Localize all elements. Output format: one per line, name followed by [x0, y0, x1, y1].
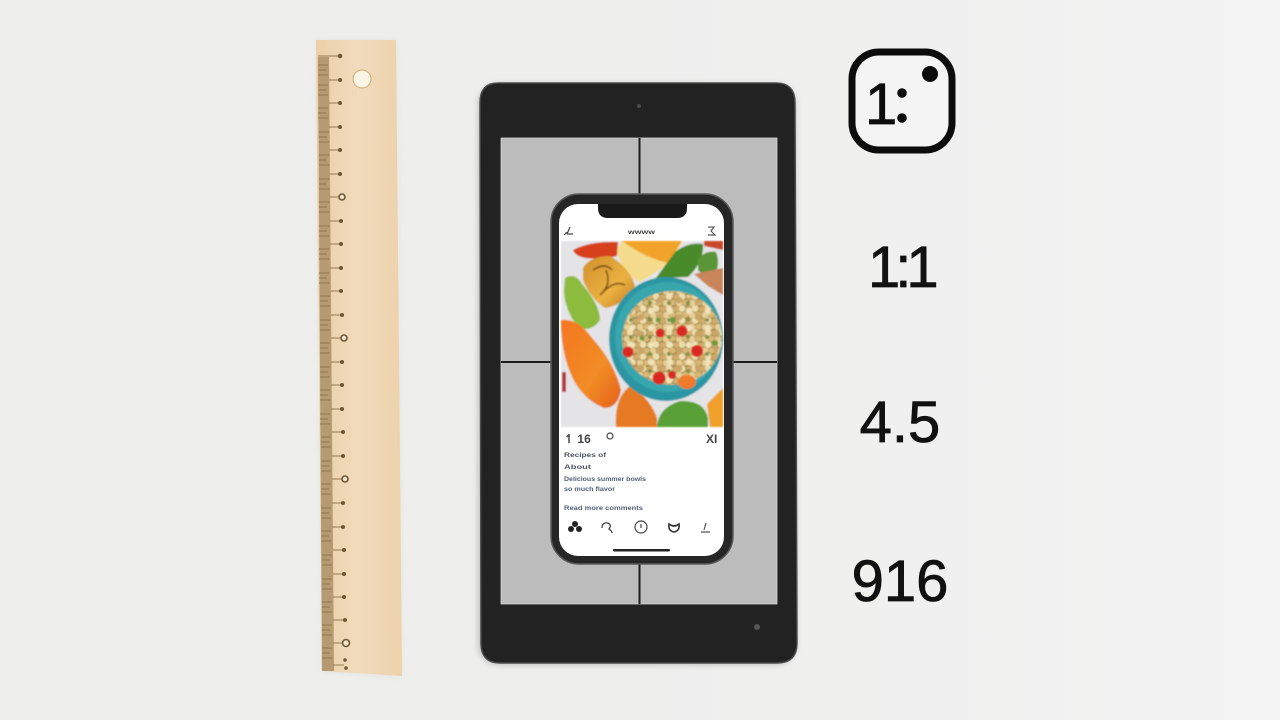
post actions: XI	[706, 432, 717, 446]
green vegetable	[656, 244, 703, 278]
nav icon 5	[701, 523, 710, 532]
nav icon 2	[602, 523, 612, 533]
ruler tick dots	[338, 54, 348, 670]
bottom nav icons	[568, 521, 710, 533]
nav icon 4	[669, 524, 679, 532]
orange piece	[678, 375, 696, 389]
ruler hanging hole	[353, 70, 371, 88]
smartphone	[551, 194, 733, 564]
post caption: Read more comments	[564, 506, 644, 512]
post caption: so much flavor	[564, 487, 616, 493]
icon: aspect ratio badge: 1	[865, 72, 897, 137]
ruler fine ticks	[318, 65, 332, 658]
label: 4.5: 4.5	[860, 390, 940, 455]
share icon	[708, 227, 715, 235]
red pepper	[573, 242, 618, 259]
icon: aspect ratio badge	[852, 52, 952, 150]
ruler	[316, 40, 402, 677]
phone screen	[559, 204, 724, 556]
ruler ring marks	[339, 194, 350, 646]
tablet screen grid	[501, 138, 777, 604]
post actions	[564, 432, 717, 446]
ruler major ticks	[318, 56, 344, 665]
bottom squash	[616, 386, 657, 427]
nav icon 3	[635, 521, 647, 533]
roasted squash	[583, 256, 635, 308]
post caption: Delicious summer bowls	[564, 477, 647, 483]
app top bar	[564, 227, 715, 236]
red chili	[562, 372, 566, 392]
label: 916: 916	[852, 549, 948, 614]
tablet body	[480, 83, 797, 663]
bottom right squash	[707, 388, 723, 427]
label: 1:1: 1:1	[868, 235, 936, 300]
tablet camera	[637, 104, 641, 108]
app top bar: wwww	[627, 229, 656, 236]
green avocado	[564, 276, 600, 329]
post caption	[564, 453, 647, 512]
tablet home sensor	[754, 624, 760, 630]
post caption: Recipes of	[564, 453, 607, 459]
back icon	[564, 227, 573, 235]
grain salad	[622, 291, 722, 385]
nav icon 1	[568, 521, 582, 532]
mango slice	[617, 241, 682, 282]
home indicator	[613, 549, 670, 552]
red pepper pieces	[622, 326, 703, 384]
bottom green	[657, 401, 708, 427]
ruler scale band	[318, 57, 334, 671]
post actions: ↿ 16	[564, 432, 591, 446]
ruler body	[316, 40, 402, 676]
right garnish	[704, 241, 723, 250]
phone notch	[598, 204, 687, 218]
green herb	[640, 317, 718, 346]
teal bowl	[609, 277, 723, 401]
papaya	[561, 320, 621, 408]
post caption: About	[564, 465, 591, 471]
food photo	[561, 241, 723, 427]
tablet	[478, 83, 797, 665]
